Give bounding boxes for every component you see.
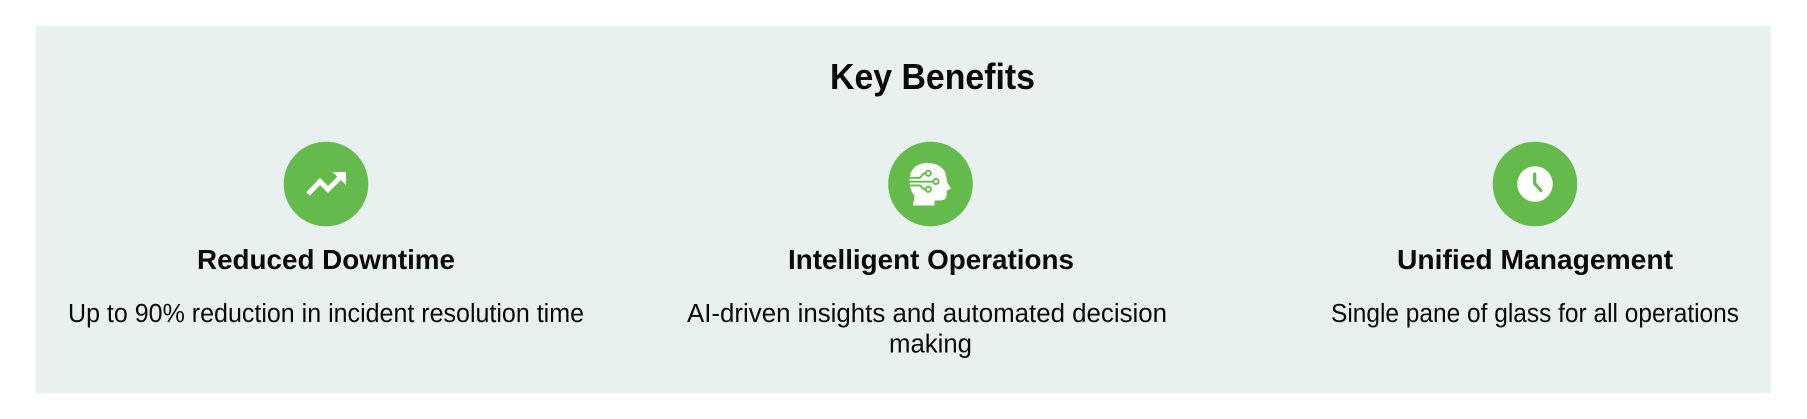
panel: unified management [1331, 142, 1739, 328]
panel: intelligent operations [687, 142, 1167, 358]
text: intelligent operations description: AI-driven insights and automated decision [687, 300, 1167, 328]
icon: clock [1493, 142, 1577, 226]
text: intelligent operations description [687, 300, 1167, 358]
text: unified management description: Single pane of glass for all operations [1331, 300, 1739, 328]
text: intelligent operations description: making [889, 330, 972, 358]
panel: reduced downtime [68, 142, 584, 328]
icon: AI head with circuits [888, 142, 973, 226]
icon: trending up arrow [284, 142, 368, 226]
title: Key Benefits [830, 56, 1035, 97]
heading: reduced downtime: Reduced Downtime [197, 244, 455, 275]
heading: unified management: Unified Management [1397, 244, 1673, 275]
heading: intelligent operations: Intelligent Operations [788, 244, 1074, 275]
text: reduced downtime description: Up to 90% reduction in incident resolution time [68, 300, 584, 328]
